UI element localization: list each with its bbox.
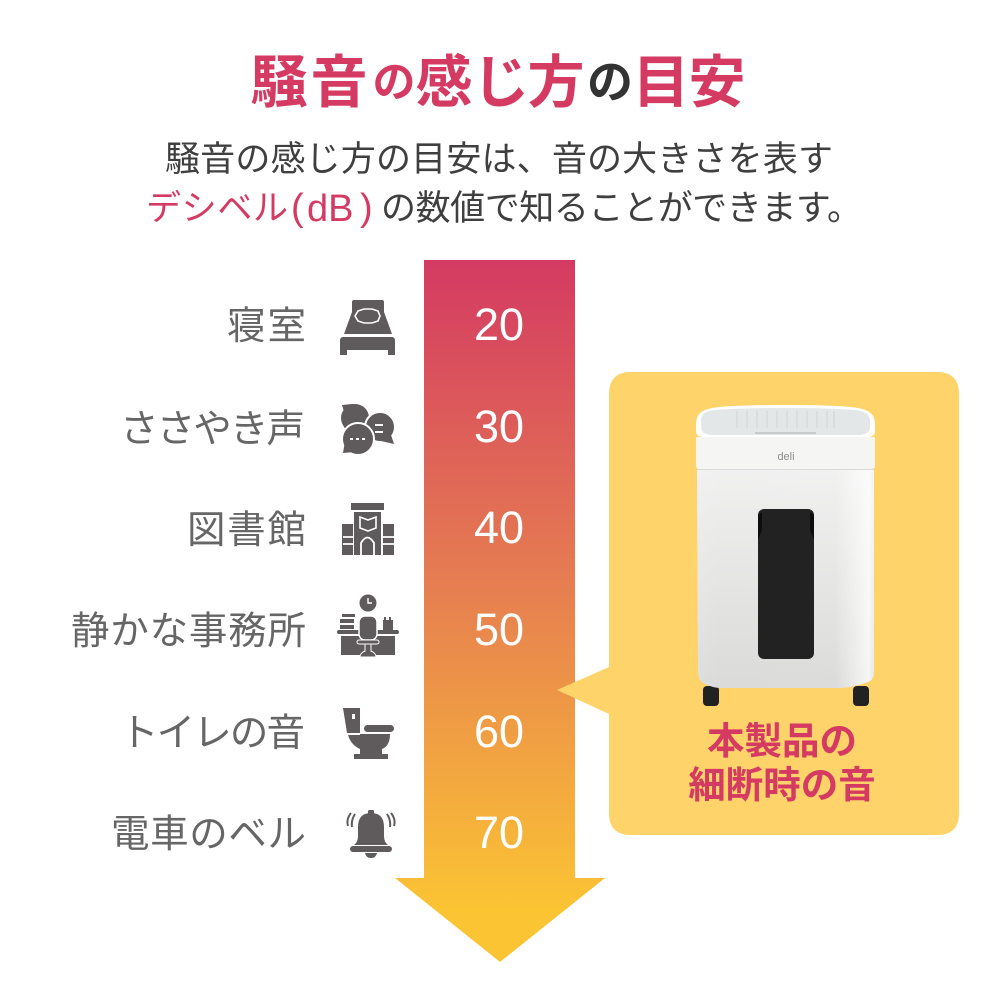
icon: bed (340, 300, 395, 355)
title: 感 (416, 51, 472, 115)
sound labels: 図書館 (187, 509, 306, 552)
icon: toilet (343, 708, 394, 759)
decibel numbers: 50 (474, 604, 524, 655)
title: の (587, 56, 633, 108)
title: 方 (528, 51, 584, 115)
decibel numbers (474, 299, 524, 858)
title: じ (472, 51, 530, 115)
icon: bell (347, 810, 395, 858)
icon: office desk (337, 594, 399, 657)
callout text: 細断時の音 (688, 764, 876, 806)
body (697, 470, 874, 688)
title: 目 (632, 51, 690, 115)
icon: library (342, 503, 394, 555)
sound labels: 寝室 (227, 305, 306, 348)
decibel numbers: 60 (474, 706, 524, 757)
sound labels: 電車のベル (111, 813, 306, 856)
panel: product callout (557, 372, 959, 835)
window (758, 509, 814, 659)
intro text: デシベル (146, 189, 288, 228)
title: の (372, 59, 416, 107)
decibel numbers: 70 (474, 807, 524, 858)
intro text (146, 140, 862, 230)
intro text: ( (291, 187, 304, 229)
callout text (688, 720, 876, 806)
title: 騒 (250, 51, 308, 115)
title: 音 (310, 51, 368, 115)
sound labels (71, 305, 306, 856)
title (250, 51, 746, 115)
lid (696, 437, 875, 469)
decibel numbers: 20 (474, 299, 524, 350)
icon: speech bubbles (341, 404, 395, 455)
sound labels: トイレの音 (120, 712, 305, 755)
sound labels: ささやき声 (120, 408, 305, 451)
intro text: の数値で知ることができます。 (381, 189, 862, 228)
title: 安 (688, 51, 746, 115)
brand: deli (777, 451, 795, 463)
decibel numbers: 40 (474, 502, 524, 553)
sound labels: 静かな事務所 (71, 610, 306, 653)
callout text: 本製品の (707, 720, 857, 762)
product: shredder (696, 405, 875, 706)
intro text: dB (307, 188, 353, 230)
casters (703, 686, 719, 706)
intro text: 騒音の感じ方の目安は、音の大きさを表す (165, 140, 833, 179)
arrow: decibel scale (395, 260, 605, 962)
intro text: ) (360, 187, 373, 229)
decibel numbers: 30 (474, 401, 524, 452)
